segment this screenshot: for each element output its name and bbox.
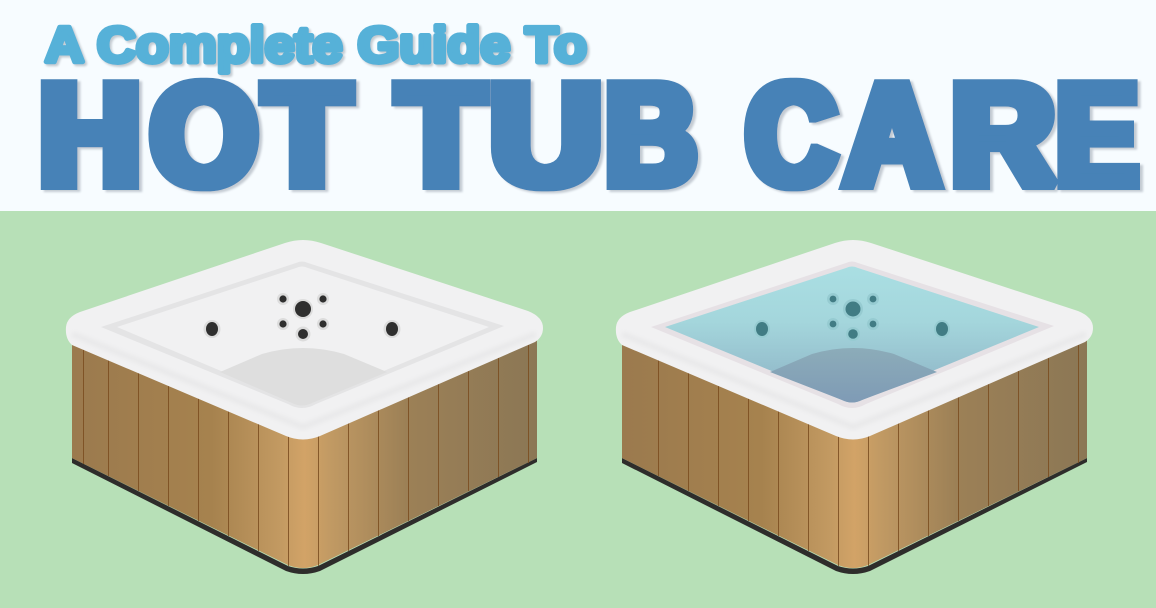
wood plank lines <box>84 345 528 566</box>
subtitle: A Complete Guide To: A Complete Guide To <box>45 17 587 73</box>
header background <box>0 0 1156 211</box>
title: HOT TUB CARE: C <box>746 53 836 216</box>
wood siding <box>72 340 537 568</box>
rim bevel shading <box>622 334 1086 427</box>
base trim <box>622 458 1087 574</box>
jets <box>204 293 400 342</box>
title: HOT TUB CARE: B <box>606 54 696 216</box>
white rim <box>66 240 543 440</box>
submerged seat <box>770 348 937 402</box>
title: HOT TUB CARE: H <box>40 54 140 216</box>
title: HOT TUB CARE: T <box>398 55 484 216</box>
title: HOT TUB CARE: E <box>1057 54 1137 216</box>
basin ring <box>651 262 1054 408</box>
seat <box>220 348 387 406</box>
empty hot tub <box>66 240 543 574</box>
wood plank lines <box>658 345 1078 566</box>
title: HOT TUB CARE: U <box>490 53 602 216</box>
rim bevel shading <box>72 334 536 427</box>
green background panel <box>0 211 1156 608</box>
title: HOT TUB CARE: O <box>151 54 257 215</box>
title: HOT TUB CARE <box>40 53 1137 216</box>
basin outer ring <box>101 262 504 408</box>
wood siding <box>622 340 1087 568</box>
filled hot tub <box>616 240 1093 574</box>
water surface <box>665 266 1039 402</box>
jets under water <box>754 293 950 341</box>
title: HOT TUB CARE: A <box>845 54 939 216</box>
base trim <box>72 458 537 574</box>
title: HOT TUB CARE: R <box>952 54 1054 216</box>
white rim <box>616 240 1093 440</box>
basin floor <box>117 266 489 404</box>
title: HOT TUB CARE: T <box>264 54 350 216</box>
